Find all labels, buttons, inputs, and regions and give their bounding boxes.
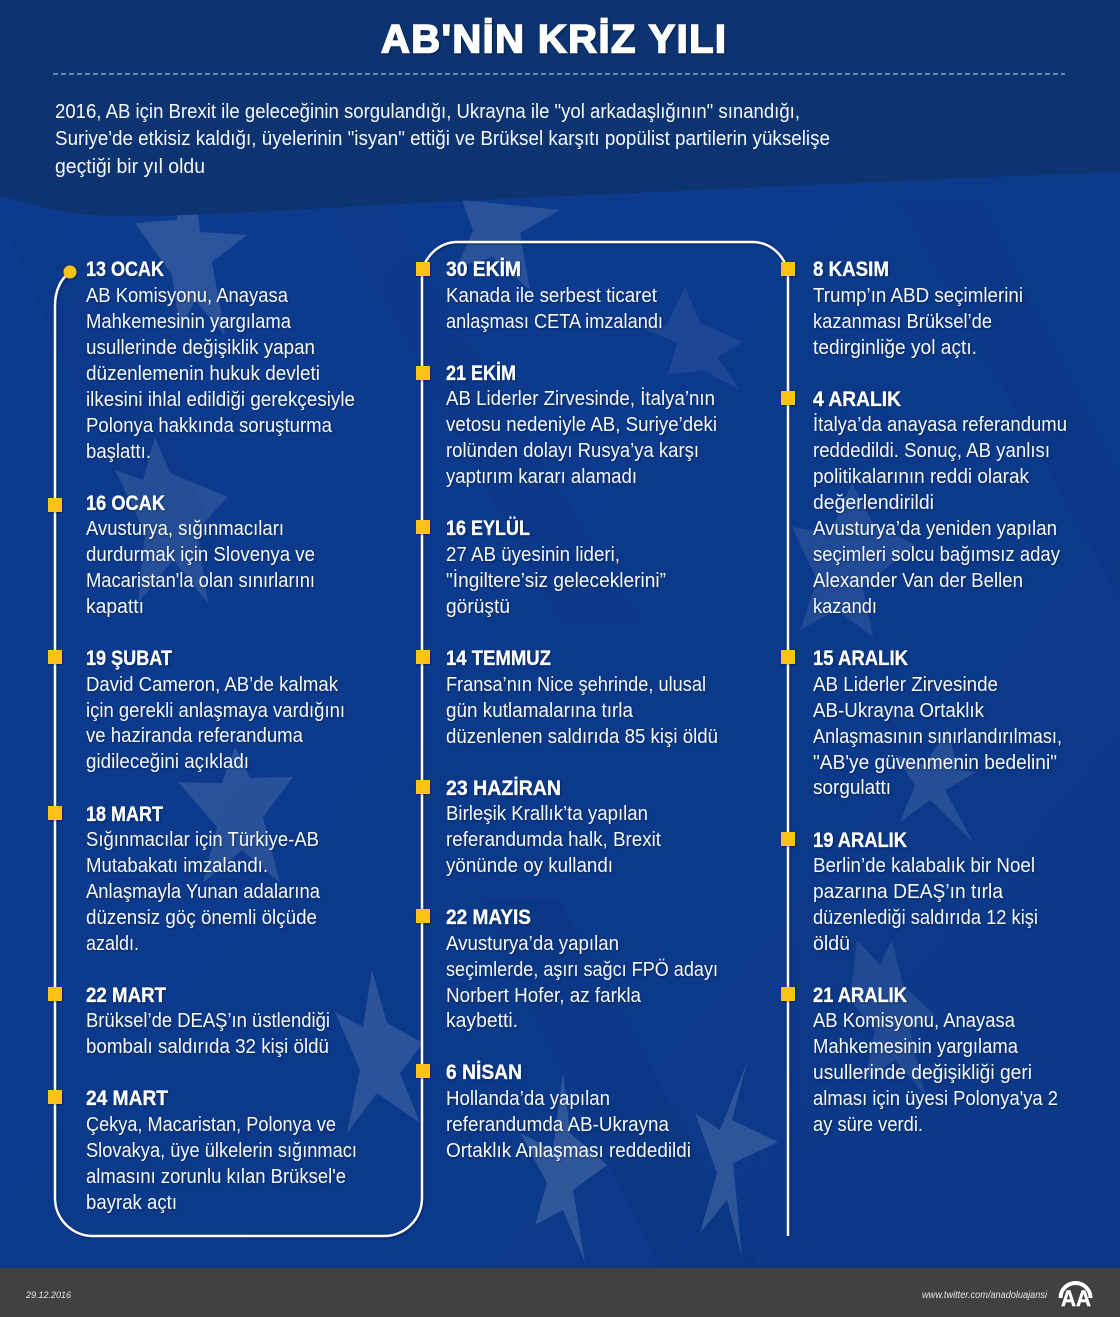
entry: 30 Ekim bbox=[416, 258, 663, 333]
entry: 18 Mart: Mutabakatı imzalandı. bbox=[86, 855, 268, 877]
entry: 13 Ocak: düzenlemenin hukuk devleti bbox=[86, 363, 320, 385]
intro text: 2016, AB için Brexit ile geleceğinin sorgulandığı, Ukrayna ile "yol arkadaşlığının" sınandığı, bbox=[55, 101, 800, 123]
entry: 23 Haziran: Birleşik Krallık’ta yapılan bbox=[446, 803, 648, 825]
entry: 24 Mart bbox=[48, 1087, 357, 1214]
entry: 15 Aralık bbox=[781, 647, 1062, 799]
entry: 19 Şubat: için gerekli anlaşmaya vardığını bbox=[86, 700, 345, 722]
entry: 21 Aralık: 21 ARALIK bbox=[813, 984, 907, 1007]
entry: 24 Mart: bayrak açtı bbox=[86, 1192, 177, 1214]
entry: 16 Ocak: Macaristan'la olan sınırlarını bbox=[86, 570, 315, 592]
entry: 13 Ocak: başlattı. bbox=[86, 441, 151, 463]
entry: 19 Şubat bbox=[48, 647, 345, 773]
entry: 24 Mart: Çekya, Macaristan, Polonya ve bbox=[86, 1114, 336, 1136]
column 2 bbox=[416, 258, 718, 1162]
entry: 21 Aralık: alması için üyesi Polonya'ya 2 bbox=[813, 1088, 1058, 1110]
entry: 8 Kasım bbox=[781, 258, 1023, 359]
entry: 4 Aralık: Avusturya’da yeniden yapılan bbox=[813, 518, 1057, 540]
entry: 19 Şubat: David Cameron, AB’de kalmak bbox=[86, 674, 339, 696]
entry: 4 Aralık: kazandı bbox=[813, 596, 877, 618]
entry: 15 Aralık: 15 ARALIK bbox=[813, 647, 908, 670]
entry: 22 Mayıs: kaybetti. bbox=[446, 1010, 518, 1032]
entry: 4 Aralık: değerlendirildi bbox=[813, 492, 934, 514]
entry: 19 Aralık: öldü bbox=[813, 933, 850, 955]
entry: 4 Aralık: seçimleri solcu bağımsız aday bbox=[813, 544, 1060, 566]
entry: 22 Mayıs: Norbert Hofer, az farkla bbox=[446, 985, 642, 1007]
entry: 22 Mart: 22 MART bbox=[86, 984, 166, 1007]
entry: 13 Ocak: ilkesini ihlal edildiği gerekçesiyle bbox=[86, 389, 355, 411]
intro text: geçtiği bir yıl oldu bbox=[55, 156, 205, 178]
entry: 16 Eylül: görüştü bbox=[446, 596, 510, 618]
entry: 4 Aralık: Alexander Van der Bellen bbox=[813, 570, 1023, 592]
entry: 16 Eylül: 27 AB üyesinin lideri, bbox=[446, 544, 620, 566]
entry: 6 Nisan: Hollanda’da yapılan bbox=[446, 1088, 610, 1110]
entry: 22 Mart bbox=[48, 984, 330, 1058]
entry: 4 Aralık: 4 ARALIK bbox=[813, 388, 901, 411]
entry: 15 Aralık: Anlaşmasının sınırlandırılması, bbox=[813, 726, 1062, 748]
entry: 22 Mart: Brüksel’de DEAŞ’ın üstlendiği bbox=[86, 1010, 330, 1032]
entry: 21 Aralık: ay süre verdi. bbox=[813, 1114, 923, 1136]
entry: 14 Temmuz bbox=[416, 647, 718, 748]
entry: 18 Mart: 18 MART bbox=[86, 803, 163, 826]
entry: 15 Aralık: AB Liderler Zirvesinde bbox=[813, 674, 998, 696]
entry: 19 Aralık: düzenlediği saldırıda 12 kişi bbox=[813, 907, 1038, 929]
entry: 18 Mart: düzensiz göç önemli ölçüde bbox=[86, 907, 317, 929]
entry: 13 Ocak: usullerinde değişiklik yapan bbox=[86, 337, 315, 359]
entry: 15 Aralık: AB-Ukrayna Ortaklık bbox=[813, 700, 985, 722]
entry: 13 Ocak: Polonya hakkında soruşturma bbox=[86, 415, 333, 437]
entry: 21 Aralık: usullerinde değişikliği geri bbox=[813, 1062, 1032, 1084]
entry: 4 Aralık: İtalya’da anayasa referandumu bbox=[813, 413, 1067, 436]
entry: 4 Aralık: reddedildi. Sonuç, AB yanlısı bbox=[813, 440, 1050, 462]
column 3 bbox=[781, 258, 1067, 1136]
entry: 21 Ekim: yaptırım kararı alamadı bbox=[446, 466, 637, 488]
entry: 30 Ekim: Kanada ile serbest ticaret bbox=[446, 285, 657, 307]
entry: 13 Ocak: 13 OCAK bbox=[86, 258, 164, 281]
entry: 8 Kasım: 8 KASIM bbox=[813, 258, 889, 281]
entry: 16 Ocak bbox=[48, 492, 315, 618]
date: 29.12.2016 bbox=[25, 1290, 72, 1301]
entry: 8 Kasım: kazanması Brüksel’de bbox=[813, 311, 992, 333]
entry: 21 Aralık bbox=[781, 984, 1058, 1136]
entry: 16 Eylül: "İngiltere’siz geleceklerini” bbox=[446, 569, 666, 592]
entry: 18 Mart: azaldı. bbox=[86, 933, 139, 955]
entry: 24 Mart: 24 MART bbox=[86, 1087, 168, 1110]
twitter url: www.twitter.com/anadoluajansi bbox=[922, 1290, 1048, 1301]
entry: 19 Aralık bbox=[781, 829, 1038, 955]
entry: 21 Ekim: 21 EKİM bbox=[446, 362, 516, 385]
icon: AA logo: AA bbox=[1061, 1286, 1091, 1311]
footer bbox=[0, 1268, 1120, 1317]
entry: 23 Haziran: 23 HAZİRAN bbox=[446, 777, 561, 800]
entry: 8 Kasım: Trump’ın ABD seçimlerini bbox=[813, 285, 1023, 307]
entry: 19 Şubat: ve haziranda referanduma bbox=[86, 725, 304, 747]
entry: 6 Nisan bbox=[416, 1061, 691, 1162]
entry: 18 Mart: Sığınmacılar için Türkiye-AB bbox=[86, 829, 319, 851]
entry: 22 Mayıs: 22 MAYIS bbox=[446, 906, 531, 929]
entry: 13 Ocak: Mahkemesinin yargılama bbox=[86, 311, 292, 333]
entry: 30 Ekim: 30 EKİM bbox=[446, 258, 521, 281]
entry: 15 Aralık: sorgulattı bbox=[813, 777, 891, 799]
intro text bbox=[55, 101, 830, 178]
entry: 4 Aralık bbox=[781, 388, 1067, 618]
entry: 23 Haziran: referandumda halk, Brexit bbox=[446, 829, 661, 851]
entry: 21 Aralık: Mahkemesinin yargılama bbox=[813, 1036, 1019, 1058]
entry: 18 Mart: Anlaşmayla Yunan adalarına bbox=[86, 881, 321, 903]
entry: 18 Mart bbox=[48, 803, 321, 955]
entry: 13 Ocak: AB Komisyonu, Anayasa bbox=[86, 285, 289, 307]
entry: 6 Nisan: 6 NİSAN bbox=[446, 1061, 522, 1084]
entry: 16 Ocak: kapattı bbox=[86, 596, 144, 618]
entry: 8 Kasım: tedirginliğe yol açtı. bbox=[813, 337, 977, 359]
entry: 14 Temmuz: Fransa’nın Nice şehrinde, ulusal bbox=[446, 674, 706, 696]
entry: 22 Mayıs bbox=[416, 906, 718, 1032]
entry: 13 Ocak bbox=[64, 258, 355, 463]
entry: 22 Mayıs: Avusturya’da yapılan bbox=[446, 933, 619, 955]
entry: 19 Şubat: gidileceğini açıkladı bbox=[86, 751, 249, 773]
entry: 19 Şubat: 19 ŞUBAT bbox=[86, 647, 172, 670]
entry: 24 Mart: almasını zorunlu kılan Brüksel'e bbox=[86, 1166, 346, 1188]
entry: 16 Eylül bbox=[416, 517, 666, 618]
entry: 16 Ocak: 16 OCAK bbox=[86, 492, 165, 515]
title: AB'NİN KRİZ YILI bbox=[381, 18, 726, 62]
entry: 14 Temmuz: gün kutlamalarına tırla bbox=[446, 700, 634, 722]
entry: 6 Nisan: referandumda AB-Ukrayna bbox=[446, 1114, 670, 1136]
entry: 14 Temmuz: 14 TEMMUZ bbox=[446, 647, 551, 670]
entry: 15 Aralık: "AB'ye güvenmenin bedelini" bbox=[813, 752, 1057, 774]
entry: 21 Aralık: AB Komisyonu, Anayasa bbox=[813, 1010, 1016, 1032]
entry: 21 Ekim bbox=[416, 362, 717, 488]
entry: 16 Ocak: durdurmak için Slovenya ve bbox=[86, 544, 315, 566]
entry: 24 Mart: Slovakya, üye ülkelerin sığınmacı bbox=[86, 1140, 357, 1162]
entry: 21 Ekim: AB Liderler Zirvesinde, İtalya’nın bbox=[446, 387, 715, 410]
entry: 19 Aralık: 19 ARALIK bbox=[813, 829, 907, 852]
entry: 21 Ekim: rolünden dolayı Rusya’ya karşı bbox=[446, 440, 699, 462]
entry: 19 Aralık: Berlin’de kalabalık bir Noel bbox=[813, 855, 1035, 877]
entry: 22 Mayıs: seçimlerde, aşırı sağcı FPÖ adayı bbox=[446, 959, 718, 981]
entry: 19 Aralık: pazarına DEAŞ’ın tırla bbox=[813, 881, 1004, 903]
header band bbox=[0, 0, 1120, 216]
entry: 30 Ekim: anlaşması CETA imzalandı bbox=[446, 311, 663, 333]
intro text: Suriye'de etkisiz kaldığı, üyelerinin "isyan" ettiği ve Brüksel karşıtı popülist partilerin yükselişe bbox=[55, 128, 830, 150]
entry: 23 Haziran bbox=[416, 777, 661, 877]
entry: 4 Aralık: politikalarının reddi olarak bbox=[813, 466, 1030, 488]
timeline line bbox=[55, 242, 788, 1236]
column 1 bbox=[48, 258, 357, 1214]
entry: 16 Ocak: Avusturya, sığınmacıları bbox=[86, 518, 284, 540]
entry: 21 Ekim: vetosu nedeniyle AB, Suriye’deki bbox=[446, 414, 717, 436]
entry: 22 Mart: bombalı saldırıda 32 kişi öldü bbox=[86, 1036, 329, 1058]
entry: 14 Temmuz: düzenlenen saldırıda 85 kişi öldü bbox=[446, 726, 718, 748]
entry: 16 Eylül: 16 EYLÜL bbox=[446, 517, 530, 540]
entry: 23 Haziran: yönünde oy kullandı bbox=[446, 855, 613, 877]
entry: 6 Nisan: Ortaklık Anlaşması reddedildi bbox=[446, 1140, 691, 1162]
